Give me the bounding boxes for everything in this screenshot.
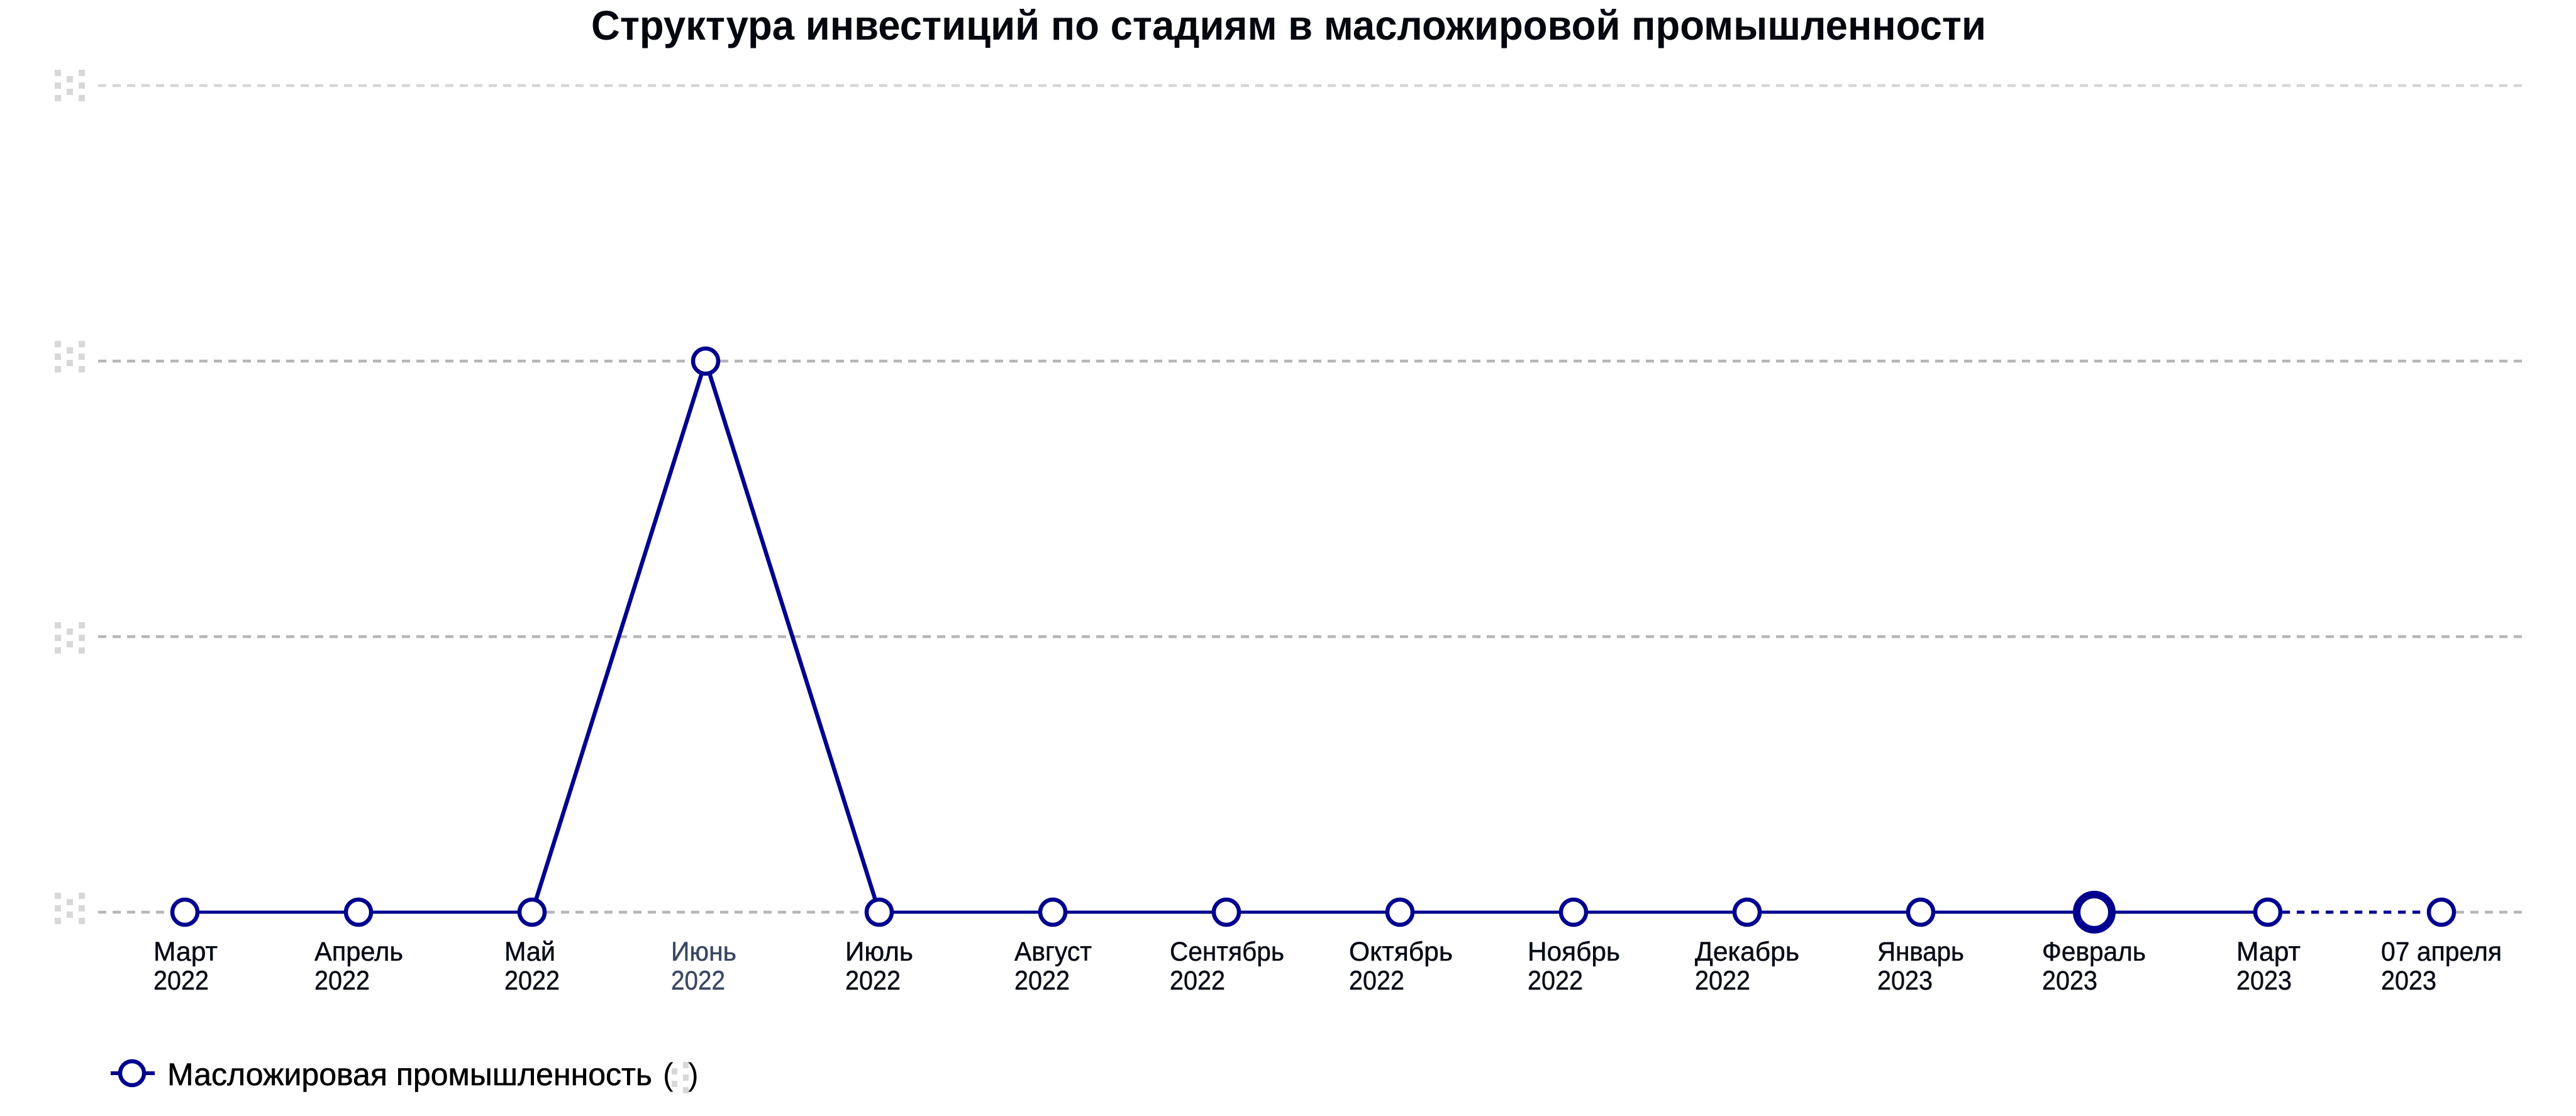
label: May 2022: Май: [504, 937, 555, 967]
masked legend value: [672, 1062, 689, 1093]
label: June 2022: 2022: [671, 966, 725, 996]
x axis labels: [153, 937, 2502, 996]
label: May 2022: 2022: [504, 966, 560, 996]
label: March 2023: [2236, 937, 2301, 996]
data markers: [172, 349, 2454, 930]
label: November 2022: [1528, 937, 1620, 996]
legend open parenthesis: (: [663, 1057, 674, 1092]
label: March 2022: 2022: [153, 966, 209, 996]
label: December 2022: [1695, 937, 1799, 996]
label: August 2022: Август: [1014, 937, 1092, 967]
legend: [111, 1057, 699, 1093]
masked y label 1: [55, 70, 85, 101]
label: October 2022: [1349, 937, 1453, 996]
label: January 2023: Январь: [1877, 937, 1964, 967]
label: July 2022: 2022: [845, 966, 901, 996]
label: November 2022: 2022: [1528, 966, 1583, 996]
label: June 2022: Июнь: [671, 937, 736, 967]
label: December 2022: Декабрь: [1695, 937, 1799, 967]
label: April 2022: [314, 937, 403, 996]
label: January 2023: 2023: [1877, 966, 1933, 996]
label: June 2022: [671, 937, 736, 996]
label: July 2022: Июль: [845, 937, 913, 967]
label: March 2023: Март: [2236, 937, 2301, 967]
masked y label 3: [55, 622, 85, 654]
label: August 2022: [1014, 937, 1092, 996]
label: November 2022: Ноябрь: [1528, 937, 1620, 967]
label: March 2022: Март: [153, 937, 218, 967]
label: September 2022: Сентябрь: [1170, 937, 1284, 967]
label: March 2023: 2023: [2236, 966, 2292, 996]
label: September 2022: 2022: [1170, 966, 1225, 996]
masked y label 4: [55, 893, 85, 924]
line series: [172, 349, 2454, 930]
label: May 2022: [504, 937, 560, 996]
label: February 2023: [2042, 937, 2146, 996]
label: September 2022: [1170, 937, 1284, 996]
label: October 2022: Октябрь: [1349, 937, 1453, 967]
label: April 2022: Апрель: [314, 937, 403, 967]
label: December 2022: 2022: [1695, 966, 1750, 996]
label: February 2023: Февраль: [2042, 937, 2146, 967]
masked y label 2: [55, 341, 85, 372]
label: 07 April 2023: 07 апреля: [2381, 937, 2502, 967]
label: August 2022: 2022: [1014, 966, 1070, 996]
title: Структура инвестиций по стадиям в масложировой промышленности: [591, 2, 1986, 48]
label: 07 April 2023: [2381, 937, 2502, 996]
legend text: Масложировая промышленность: [167, 1057, 652, 1092]
label: January 2023: [1877, 937, 1964, 996]
label: October 2022: 2022: [1349, 966, 1404, 996]
y axis: hidden tick labels and gridlines: [55, 70, 2528, 924]
legend close parenthesis: ): [688, 1057, 699, 1092]
legend marker: [111, 1061, 155, 1085]
label: July 2022: [845, 937, 913, 996]
label: 07 April 2023: 2023: [2381, 966, 2436, 996]
label: February 2023: 2023: [2042, 966, 2097, 996]
label: March 2022: [153, 937, 218, 996]
label: April 2022: 2022: [314, 966, 370, 996]
